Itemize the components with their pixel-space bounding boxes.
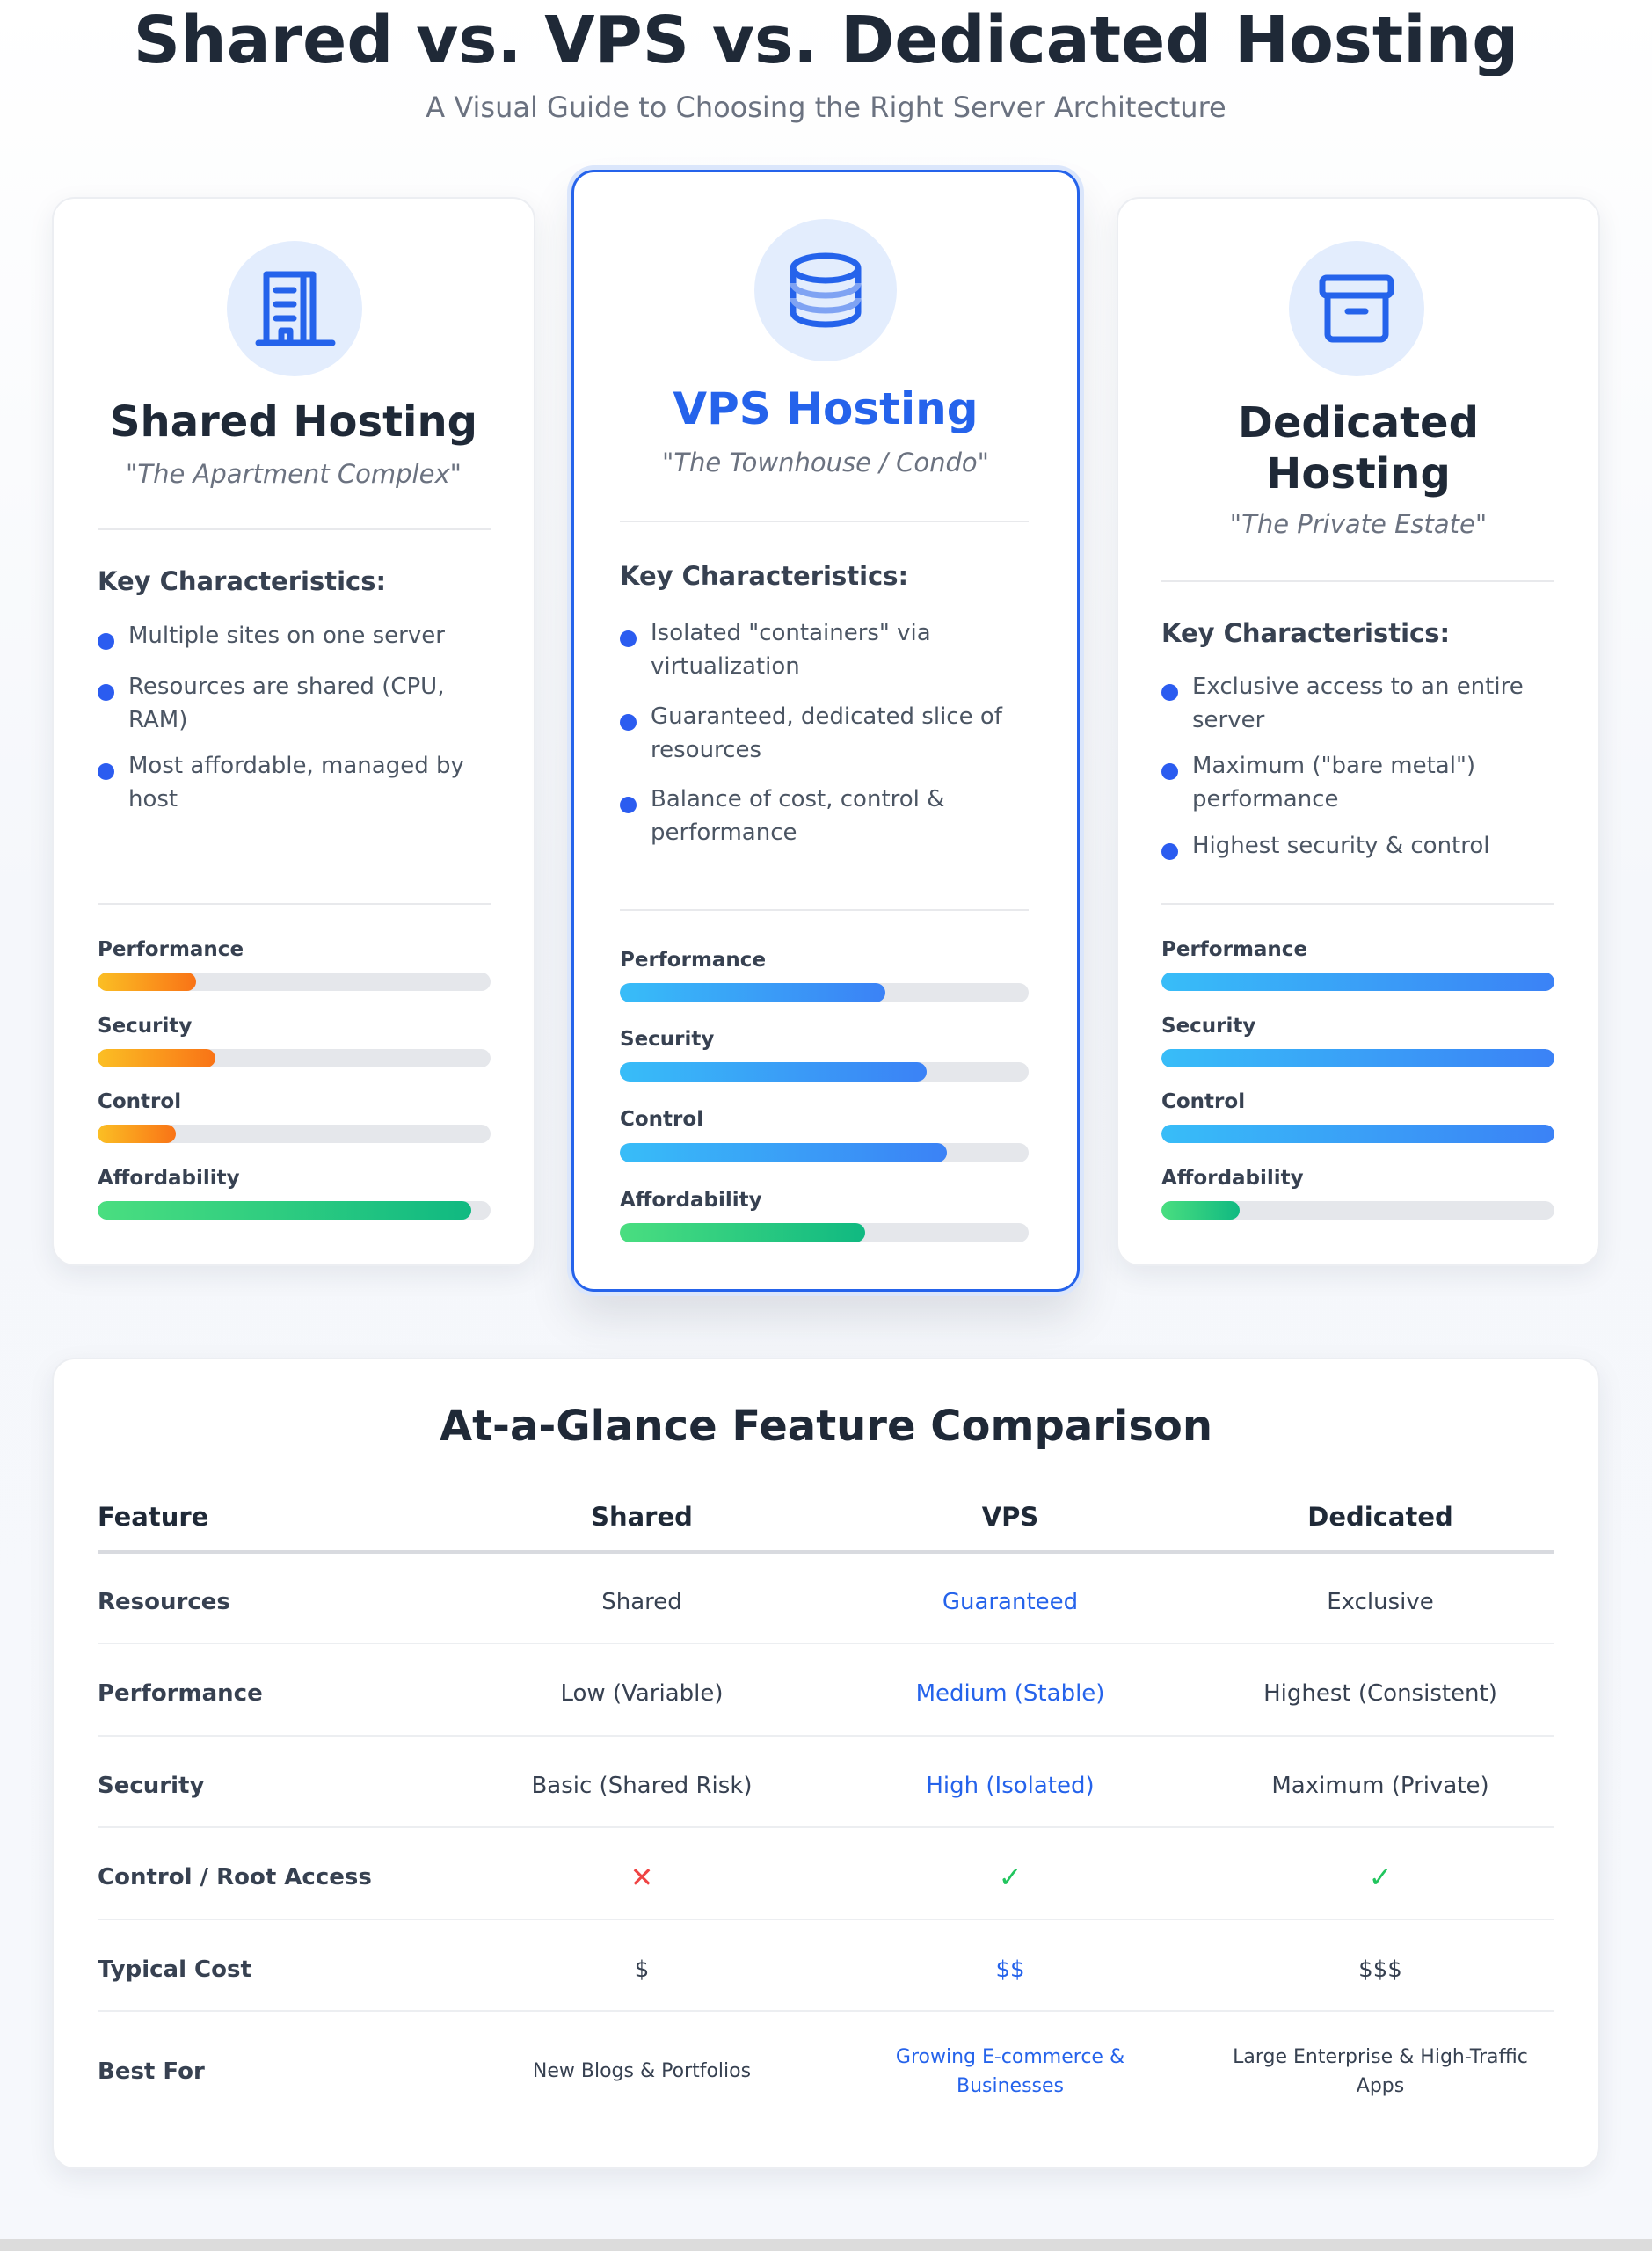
bars: vps: Control [620,1108,703,1131]
text: Basic (Shared Risk) [531,1773,753,1799]
text: Shared [601,1589,682,1615]
text: ✓ [1369,1861,1392,1894]
bullets: Isolated "containers" via virtualization [651,620,931,680]
text: Low (Variable) [560,1680,724,1707]
key characteristics: Key Characteristics: [98,566,386,596]
row: resources: Resources [98,1589,230,1615]
icon: archive [1289,241,1424,376]
row: cost: Typical Cost [98,1956,251,1983]
bars: shared: Control [98,1090,181,1113]
text: ✓ [999,1861,1022,1894]
bars: dedicated [1161,938,1554,1220]
bars: dedicated: Security [1161,1015,1255,1038]
bars: shared: Security [98,1015,192,1038]
icon: building [227,241,362,376]
text: VPS [982,1502,1038,1532]
text: Large Enterprise & High-Traffic [1233,2046,1528,2068]
text: Feature [98,1502,208,1532]
panel: vps hosting [571,170,1080,1292]
text: Businesses [957,2075,1064,2097]
text: Medium (Stable) [916,1680,1104,1707]
bars: vps: Affordability [620,1189,762,1212]
row: performance: Performance [98,1680,263,1707]
bars: dedicated: Performance [1161,938,1307,961]
text: Balance of cost, control & performance [651,786,944,846]
text: Exclusive [1327,1589,1434,1615]
text: ✕ [630,1861,653,1894]
text: Shared [591,1502,693,1532]
key characteristics: Key Characteristics: [620,561,908,591]
text: Maximum (Private) [1271,1773,1489,1799]
table heading: At-a-Glance Feature Comparison [440,1402,1212,1451]
bars: dedicated: Affordability [1161,1167,1304,1190]
title: Shared vs. VPS vs. Dedicated Hosting [134,3,1518,78]
tagline: "The Apartment Complex" [126,459,462,489]
heading: dedicated: Hosting [1266,449,1451,499]
bullets: Multiple sites on one server [128,623,445,649]
tagline: "The Private Estate" [1230,509,1487,539]
panel: dedicated hosting [1117,197,1600,1266]
row: best for: Best For [98,2058,205,2085]
text: Apps [1357,2075,1404,2097]
heading: dedicated: Dedicated [1238,398,1479,448]
text: High (Isolated) [926,1773,1095,1799]
row: control: Control / Root Access [98,1864,372,1890]
heading: dedicated [1238,398,1479,499]
text: Guaranteed, dedicated slice of resources [651,703,1002,763]
text: Highest security & control [1192,833,1489,859]
panel: comparison table [52,1358,1600,2169]
text: Growing E-commerce & [896,2046,1124,2068]
text: Guaranteed [942,1589,1078,1615]
row: security: Security [98,1773,204,1799]
subtitle: A Visual Guide to Choosing the Right Server Architecture [426,91,1226,124]
text: Dedicated [1307,1502,1453,1532]
text: $$$ [1358,1956,1402,1983]
bars: vps [620,949,1029,1242]
bars: dedicated: Control [1161,1090,1245,1113]
text: Highest (Consistent) [1263,1680,1497,1707]
text: Resources are shared (CPU, RAM) [128,674,444,733]
bars: vps: Security [620,1028,714,1051]
tagline: "The Townhouse / Condo" [662,448,989,477]
text: Most affordable, managed by host [128,753,464,812]
text: New Blogs & Portfolios [533,2060,751,2082]
bullets: Exclusive access to an entire server [1192,674,1524,733]
bars: vps: Performance [620,949,766,972]
bars: shared [98,938,491,1220]
heading: shared: Shared Hosting [110,397,477,447]
text: $$ [995,1956,1025,1983]
bars: shared: Performance [98,938,244,961]
text: $ [635,1956,649,1983]
table header [98,1501,1554,1554]
bars: shared: Affordability [98,1167,240,1190]
panel: shared hosting [52,197,535,1266]
key characteristics: Key Characteristics: [1161,618,1450,648]
heading: vps: VPS Hosting [673,383,979,434]
text: Maximum ("bare metal") performance [1192,753,1475,812]
icon: database [754,219,897,361]
